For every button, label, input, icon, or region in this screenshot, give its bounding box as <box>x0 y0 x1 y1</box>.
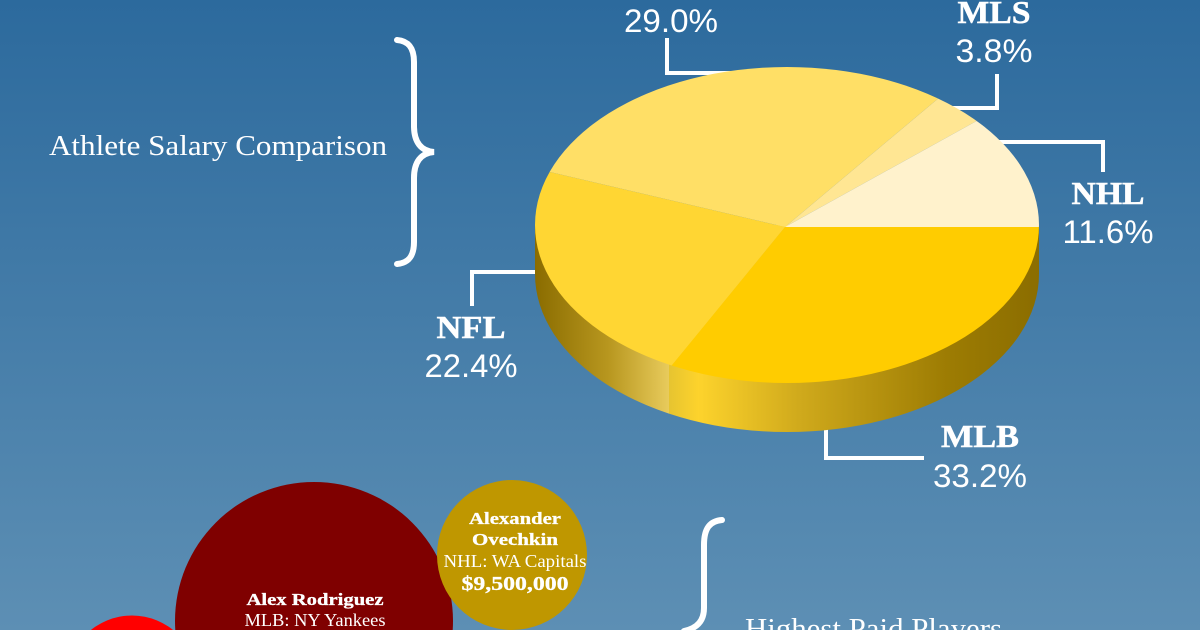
slice: MLB 33.2% <box>672 227 1039 383</box>
label: NFL: NFL <box>436 309 506 345</box>
label: NFL: 22.4% <box>424 348 518 384</box>
slice: NHL 11.6% <box>785 121 1039 227</box>
label: NFL <box>424 309 518 384</box>
label: NBA: 29.0% <box>624 3 718 39</box>
label: MLB: MLB <box>941 418 1019 454</box>
label: NHL: NHL <box>1072 175 1144 211</box>
bubble: Alexander Ovechkin: Alexander <box>469 509 562 528</box>
bubble: Alex Rodriguez: MLB: NY Yankees <box>244 610 386 630</box>
label: NHL: 11.6% <box>1062 214 1154 250</box>
bubble: Alexander Ovechkin <box>437 480 587 630</box>
label: NHL <box>1062 175 1154 250</box>
label: MLB: 33.2% <box>933 458 1027 494</box>
pie side wall: left <box>535 226 669 414</box>
bubble: Alexander Ovechkin: Ovechkin <box>472 530 559 549</box>
bubble: Alexander Ovechkin: $9,500,000 <box>462 573 568 595</box>
pie chart <box>535 67 1039 432</box>
slice: NBA 29.0% <box>550 67 938 227</box>
heading: athlete salary comparison: Athlete Salary Comparison <box>49 130 388 162</box>
bubble: Alex Rodriguez: Alex Rodriguez <box>246 590 384 609</box>
bubble: red player <box>66 616 198 630</box>
label: MLB <box>933 418 1027 494</box>
bubble: Alex Rodriguez <box>175 482 453 630</box>
slice: MLS 3.8% <box>786 98 976 226</box>
pie side wall: right <box>669 225 1039 432</box>
slice: NFL 22.4% <box>535 172 785 366</box>
label: MLS <box>956 0 1032 69</box>
leader lines <box>472 38 1103 458</box>
brace: highest paid players <box>684 520 722 630</box>
pie top face <box>535 67 1039 383</box>
brace: salary comparison <box>397 40 434 264</box>
label: MLS: 3.8% <box>956 33 1032 69</box>
bubble: Alexander Ovechkin: NHL: WA Capitals <box>444 551 586 571</box>
